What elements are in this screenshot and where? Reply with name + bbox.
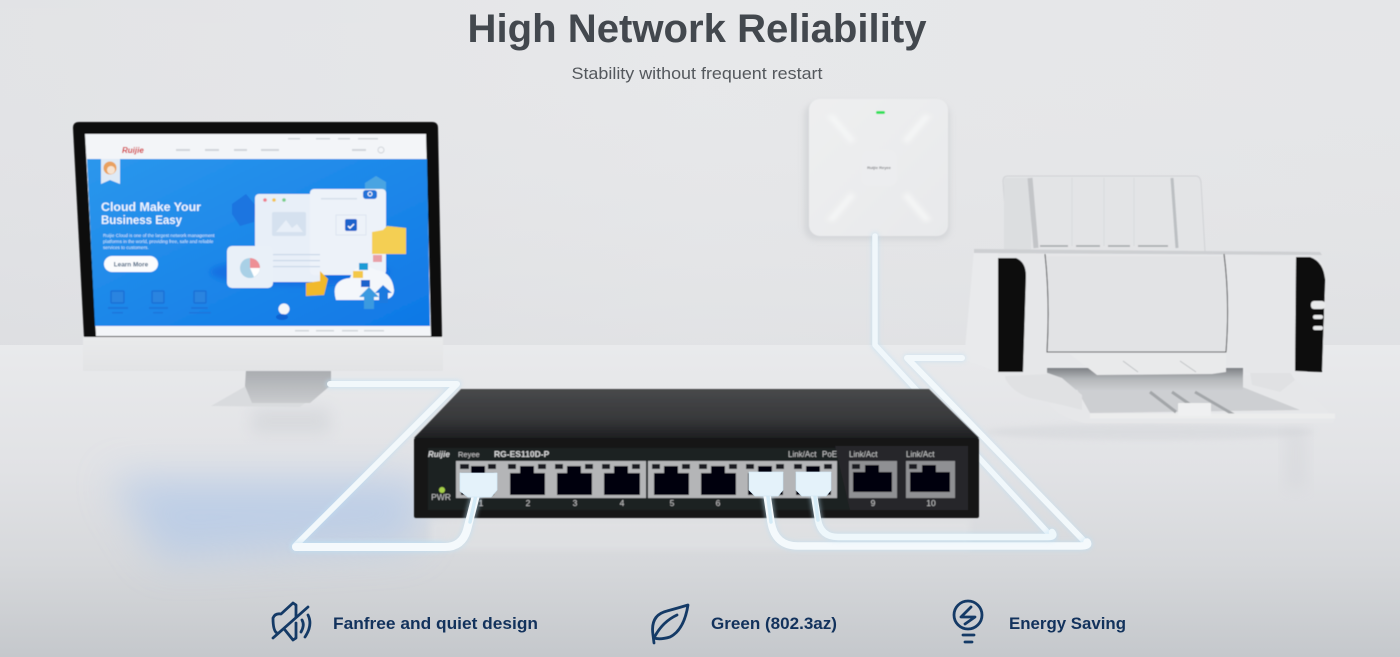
switch port band (456, 461, 955, 498)
port numbers: 5 (670, 498, 675, 508)
screen nav (176, 138, 384, 332)
switch top face (414, 389, 979, 438)
printer output tray (1070, 354, 1226, 375)
icon: leaf (653, 605, 688, 643)
monitor screen: platforms in the world, providing free, safe and reliable (103, 239, 214, 244)
monitor (73, 122, 443, 407)
screen button: Learn More (114, 262, 149, 268)
port numbers: 6 (716, 498, 721, 508)
printer tray slider (1178, 403, 1211, 416)
monitor bezel (73, 122, 442, 337)
icon: muted speaker (273, 603, 310, 640)
screen badge (101, 159, 120, 184)
port numbers (479, 498, 936, 508)
switch model: RG-ES110D-P (494, 449, 550, 459)
access point status led (876, 111, 885, 114)
cable: access point link (875, 236, 1052, 537)
title: High Network Reliability (468, 7, 927, 51)
access point body (809, 99, 948, 236)
monitor screen: services to customers. (103, 245, 149, 250)
monitor screen: Business Easy (101, 213, 182, 227)
port numbers: 3 (573, 498, 578, 508)
network switch: Link/Act (849, 450, 878, 459)
cable 1 to port 1 (296, 473, 497, 547)
network switch: Reyee (458, 450, 480, 459)
feature: green (653, 605, 837, 643)
screen logo: Ruijie (122, 146, 144, 155)
network switch (414, 389, 979, 518)
cable: monitor link (295, 384, 457, 546)
port numbers: 4 (620, 498, 625, 508)
feature: energy saving (954, 601, 1126, 642)
screen body text: Ruijie Cloud is one of the largest network management (103, 233, 215, 238)
label: Green (802.3az) (711, 614, 837, 633)
printer paper support (1003, 176, 1205, 252)
network switch: Link/Act (906, 450, 935, 459)
printer base tray (1005, 368, 1335, 423)
label: Fanfree and quiet design (333, 614, 538, 633)
port numbers: 9 (871, 498, 876, 508)
subtitle: Stability without frequent restart (572, 64, 823, 83)
printer (964, 176, 1335, 423)
background: wall (0, 0, 1400, 346)
switch front face (414, 438, 979, 518)
screen headline: Cloud Make Your (101, 200, 201, 214)
switch port labels top: Link/Act (788, 450, 817, 459)
monitor chin (83, 337, 443, 371)
screen button (104, 256, 158, 272)
ethernet ports (461, 465, 950, 495)
background: desk (0, 345, 1400, 657)
access point logo: Ruijie Reyee (867, 165, 892, 170)
monitor screen (85, 134, 431, 336)
access point (804, 99, 950, 240)
printer right black band (1295, 257, 1325, 372)
screen stats (111, 291, 206, 303)
printer cover (1046, 256, 1227, 352)
port numbers: 2 (526, 498, 531, 508)
port leds (460, 464, 917, 469)
cable: printer link (907, 358, 1087, 544)
printer buttons (1311, 301, 1325, 330)
screen illustration (227, 176, 406, 320)
network cables: rear sections (295, 236, 1087, 546)
printer left foot (1005, 372, 1082, 410)
feature: fanfree (273, 603, 538, 640)
icon: energy bulb (954, 601, 982, 642)
port numbers: 1 (479, 498, 484, 508)
printer body (964, 250, 1325, 376)
printer left black band (998, 258, 1026, 372)
power indicator (439, 487, 445, 493)
port numbers: 10 (926, 498, 936, 508)
switch brand: Ruijie (428, 450, 450, 459)
network switch: PoE (822, 450, 837, 459)
label: Energy Saving (1009, 614, 1126, 633)
monitor stand (211, 370, 331, 407)
network cables: front sections and plugs (296, 472, 1088, 547)
cable 3 to port 8 (796, 472, 1053, 537)
network switch: PWR (431, 492, 451, 502)
cable 2 to port 7 (749, 472, 1088, 546)
